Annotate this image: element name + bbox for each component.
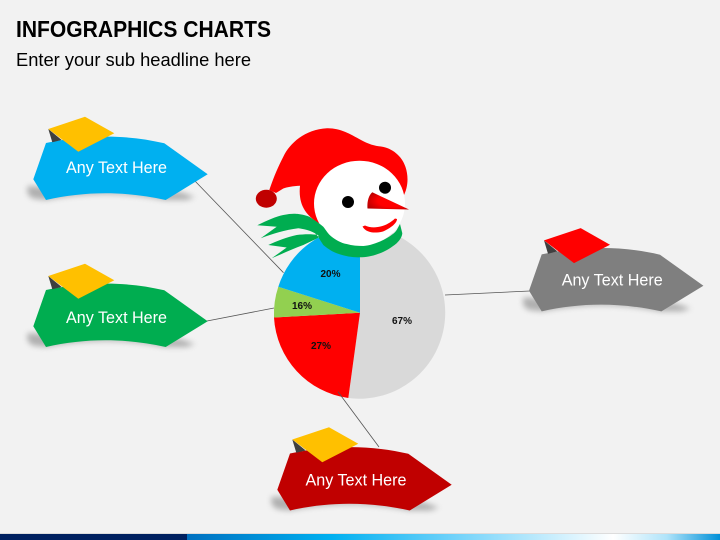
nose: [367, 192, 409, 210]
shadow: [27, 333, 195, 347]
shadow: [523, 297, 691, 311]
callout: blue: [27, 117, 208, 200]
banner: [277, 447, 452, 510]
title: INFOGRAPHICS CHARTS: [16, 16, 271, 42]
smile: [362, 218, 397, 233]
pie slice: grey 67%: [348, 227, 445, 399]
banner: [33, 137, 208, 200]
dark fold: [48, 276, 62, 289]
diamond tag: [48, 117, 114, 152]
diamond tag: [292, 427, 358, 462]
pie label 16%: 16%: [292, 301, 312, 312]
callout: grey: [523, 228, 703, 311]
dark fold: [292, 440, 306, 453]
connector: grey: [445, 291, 530, 295]
pie slice: blue 20%: [278, 227, 360, 313]
pompom: [256, 190, 277, 208]
pie label 27%: 27%: [311, 341, 331, 352]
right eye: [379, 182, 391, 194]
diamond tag: [544, 228, 610, 263]
label: Any Text Here: [66, 308, 167, 327]
callout: green: [27, 264, 208, 347]
callout: red: [271, 427, 452, 510]
shadow: [27, 186, 195, 200]
pie label 67%: 67%: [392, 316, 412, 327]
banner: [33, 284, 208, 347]
head: [314, 161, 405, 246]
dark fold: [544, 240, 557, 254]
sub headline: Enter your sub headline here: [16, 50, 251, 70]
connector: red: [338, 392, 379, 447]
left eye: [342, 196, 354, 208]
scarf: [257, 214, 402, 258]
pie slice: green 16%: [274, 287, 360, 318]
diamond tag: [48, 264, 114, 299]
label: Any Text Here: [562, 270, 663, 289]
shadow: [271, 496, 439, 510]
pie label 20%: 20%: [320, 269, 341, 280]
pie slice: red 27%: [274, 313, 360, 398]
connector: blue: [194, 180, 284, 273]
label: Any Text Here: [66, 158, 167, 177]
hat: [269, 128, 408, 230]
dark fold: [48, 129, 62, 142]
banner: [529, 248, 703, 311]
bottom bar: [0, 533, 720, 540]
pie chart: [274, 227, 445, 399]
connector: green: [207, 308, 274, 321]
label: Any Text Here: [306, 470, 406, 490]
snowman: [256, 128, 409, 258]
